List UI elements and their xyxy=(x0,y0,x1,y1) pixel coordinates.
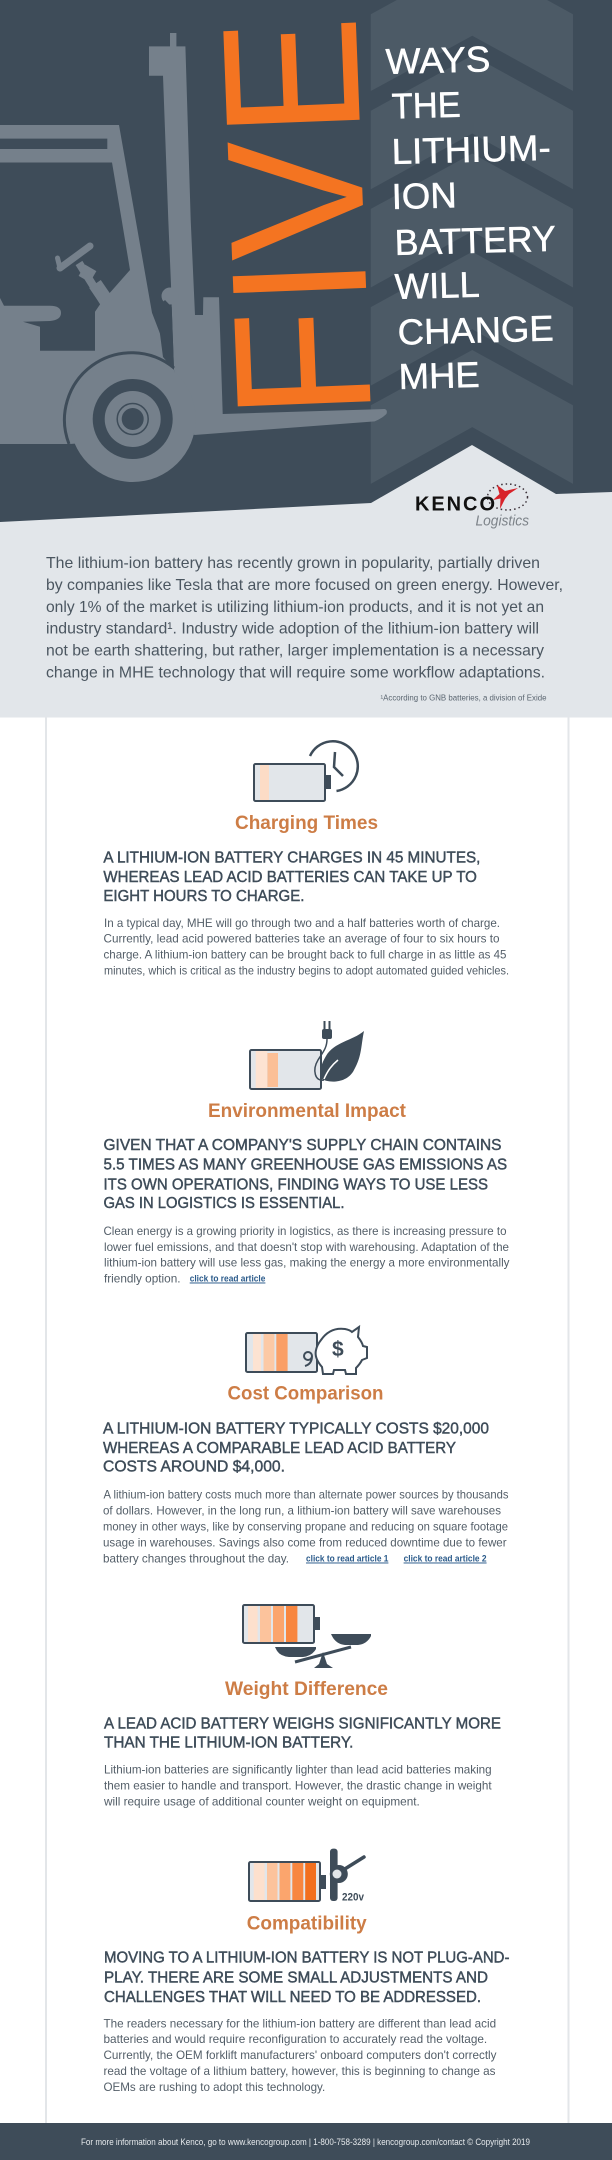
footer bar xyxy=(0,2123,612,2160)
icon: battery with switch: 220v xyxy=(342,1891,365,1903)
subheading xyxy=(104,1137,507,1212)
subheading: A LITHIUM-ION BATTERY TYPICALLY COSTS $20,000 xyxy=(103,1421,489,1438)
subheading: ITS OWN OPERATIONS, FINDING WAYS TO USE LESS xyxy=(104,1176,488,1193)
chevron column background xyxy=(371,0,573,484)
body text: will require usage of additional counter weight on equipment. xyxy=(103,1794,420,1808)
intro paragraph: industry standard¹. Industry wide adoption of the lithium-ion battery will xyxy=(46,620,539,638)
links: click to read article 2 xyxy=(404,1554,487,1564)
body text: Lithium-ion batteries are significantly lighter than lead acid batteries making xyxy=(104,1762,492,1776)
panel: environmental impact xyxy=(104,1021,510,1285)
heading: weight difference: Weight Difference xyxy=(225,1679,388,1700)
body text: Currently, lead acid powered batteries take an average of four to six hours to xyxy=(104,932,500,946)
subheading: WHEREAS A COMPARABLE LEAD ACID BATTERY xyxy=(103,1440,456,1457)
logo: Kenco Logistics: KENCO xyxy=(415,494,495,516)
subheading: GAS IN LOGISTICS IS ESSENTIAL. xyxy=(104,1195,344,1212)
subheading: CHALLENGES THAT WILL NEED TO BE ADDRESSED. xyxy=(104,1989,481,2006)
body text: Currently, the OEM forklift manufacturers' onboard computers don't correctly xyxy=(104,2048,496,2062)
intro paragraph: The lithium-ion battery has recently grown in popularity, partially driven xyxy=(46,555,540,572)
subheading: 5.5 TIMES AS MANY GREENHOUSE GAS EMISSIONS AS xyxy=(104,1156,507,1173)
title text: ways the lithium-ion battery will change MHE: CHANGE xyxy=(397,308,554,353)
title text: ways the lithium-ion battery will change MHE: WILL xyxy=(394,264,480,307)
title text: ways the lithium-ion battery will change MHE: WAYS xyxy=(385,38,491,82)
panel: cost comparison xyxy=(103,1327,508,1565)
body text: In a typical day, MHE will go through two and a half batteries worth of charge. xyxy=(104,916,500,930)
subheading xyxy=(104,1950,510,2006)
logo: Kenco Logistics: Logistics xyxy=(476,513,529,530)
icon: battery with switch xyxy=(249,1849,365,1903)
title text: ways the lithium-ion battery will change MHE: BATTERY xyxy=(394,218,556,263)
subheading: MOVING TO A LITHIUM-ION BATTERY IS NOT PLUG-AND- xyxy=(104,1950,510,1966)
panel: charging times xyxy=(103,741,509,978)
icon: battery with scale xyxy=(243,1605,371,1668)
FIVE title: FIVE xyxy=(182,13,412,423)
subheading xyxy=(103,1421,489,1476)
body text: charge. A lithium-ion battery can be brought back to full charge in as little as 45 xyxy=(104,948,507,962)
footnote: ¹According to GNB batteries, a division of Exide xyxy=(380,694,547,703)
icon: battery with piggy bank xyxy=(246,1327,367,1374)
body text: The readers necessary for the lithium-ion battery are different than lead acid xyxy=(104,2016,496,2030)
body text xyxy=(104,2016,496,2094)
body text: battery changes throughout the day. xyxy=(103,1551,289,1565)
subheading xyxy=(103,849,480,905)
body text xyxy=(104,1224,510,1285)
heading: cost comparison: Cost Comparison xyxy=(228,1384,384,1405)
intro paragraph xyxy=(46,555,563,682)
links xyxy=(306,1554,487,1564)
forklift silhouette xyxy=(0,33,387,482)
subheading: COSTS AROUND $4,000. xyxy=(103,1459,285,1476)
panel: compatibility xyxy=(104,1849,510,2094)
title text: ways the lithium-ion battery will change MHE: THE xyxy=(391,84,461,127)
intro paragraph: only 1% of the market is utilizing lithium-ion products, and it is not yet an xyxy=(46,599,544,616)
title text: ways the lithium-ion battery will change MHE: ION xyxy=(391,174,457,217)
body text: OEMs are rushing to adopt this technology. xyxy=(104,2080,325,2094)
body text xyxy=(103,1488,508,1565)
body text xyxy=(103,1762,492,1808)
intro paragraph: by companies like Tesla that are more focused on green energy. However, xyxy=(46,577,563,594)
subheading: WHEREAS LEAD ACID BATTERIES CAN TAKE UP TO xyxy=(103,869,477,886)
body text: Clean energy is a growing priority in logistics, as there is increasing pressure to xyxy=(104,1224,507,1238)
body text: read the voltage of a lithium battery, however, this is beginning to change as xyxy=(104,2064,496,2078)
body text: of dollars. However, in the long run, a lithium-ion battery will save warehouses xyxy=(103,1504,501,1518)
icon: battery with clock xyxy=(254,741,358,801)
heading: environmental impact: Environmental Impact xyxy=(208,1101,407,1122)
subheading xyxy=(104,1715,501,1752)
title text: ways the lithium-ion battery will change MHE: MHE xyxy=(398,354,480,397)
subheading: GIVEN THAT A COMPANY'S SUPPLY CHAIN CONTAINS xyxy=(104,1137,502,1154)
body text: batteries and would require reconfiguration to accurately read the voltage. xyxy=(104,2032,487,2046)
body text: minutes, which is critical as the industry begins to adopt automated guided vehicles. xyxy=(104,964,509,978)
title text: ways the lithium-ion battery will change MHE xyxy=(385,38,556,397)
subheading: PLAY. THERE ARE SOME SMALL ADJUSTMENTS AND xyxy=(104,1970,488,1986)
footer text: For more information about Kenco, go to www.kencogroup.com | 1-800-758-3289 | kencogroup.com/contact © Copyright 2019 xyxy=(81,2137,530,2147)
hero banner xyxy=(0,0,612,560)
icon: battery with piggy bank: $ xyxy=(332,1338,344,1361)
body text: lower fuel emissions, and that doesn't stop with warehousing. Adaptation of the xyxy=(104,1240,509,1254)
body text xyxy=(104,916,509,978)
links: click to read article 1 xyxy=(306,1554,389,1564)
body text: A lithium-ion battery costs much more than alternate power sources by thousands xyxy=(104,1488,508,1502)
icon: battery with plug and leaf xyxy=(250,1021,364,1089)
heading: charging times: Charging Times xyxy=(235,813,378,834)
body text: money in other ways, like by conserving propane and reducing on square footage xyxy=(103,1520,508,1534)
subheading: A LITHIUM-ION BATTERY CHARGES IN 45 MINUTES, xyxy=(103,849,480,866)
logo: Kenco Logistics xyxy=(415,484,529,530)
subheading: THAN THE LITHIUM-ION BATTERY. xyxy=(104,1735,353,1752)
title text: ways the lithium-ion battery will change MHE: LITHIUM- xyxy=(391,127,551,172)
panel: weight difference xyxy=(103,1605,501,1808)
body text: friendly option. xyxy=(104,1271,180,1285)
intro paragraph: change in MHE technology that will require some workflow adaptations. xyxy=(46,664,545,682)
link: click to read article xyxy=(190,1274,265,1284)
body text: usage in warehouses. Savings also come from reduced downtime due to fewer xyxy=(103,1535,507,1549)
intro paragraph: not be earth shattering, but rather, larger implementation is a necessary xyxy=(46,642,544,660)
subheading: EIGHT HOURS TO CHARGE. xyxy=(103,888,304,905)
subheading: A LEAD ACID BATTERY WEIGHS SIGNIFICANTLY MORE xyxy=(104,1715,501,1732)
body text: them easier to handle and transport. However, the drastic change in weight xyxy=(104,1778,492,1792)
body text: lithium-ion battery will use less gas, making the energy a more environmentally xyxy=(104,1256,510,1270)
heading: compatibility: Compatibility xyxy=(247,1914,367,1935)
intro panel xyxy=(0,445,612,718)
